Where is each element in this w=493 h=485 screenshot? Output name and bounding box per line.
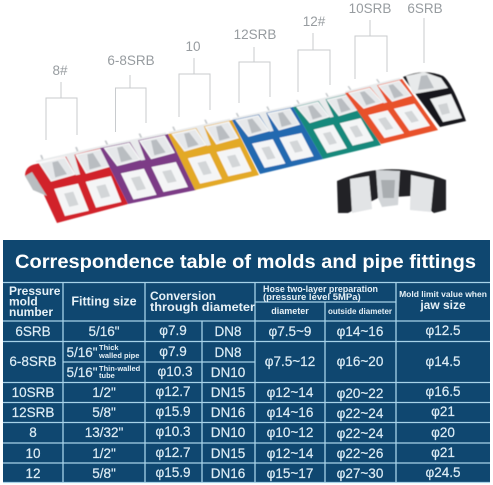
mold: black single mold detail: [337, 169, 446, 213]
row 6SRB: [15, 323, 461, 339]
header: hose: diameter: [271, 306, 309, 316]
label: 12#: 12#: [303, 14, 326, 29]
row 6-8SRB: φ7.5~12: [265, 354, 315, 369]
mold: orange 10SRB: [343, 74, 438, 144]
row 6-8SRB: 5/16": [66, 365, 98, 380]
header: hose: [263, 284, 392, 316]
row 10SRB: φ12~14: [267, 385, 314, 400]
table panel: [3, 240, 490, 483]
row 10SRB: 10SRB: [12, 385, 54, 400]
row 10: φ12~14: [267, 446, 314, 461]
row 12SRB: φ22~24: [337, 406, 384, 421]
header: mold number: Pressure: [9, 284, 61, 298]
row 8: 8: [29, 425, 37, 440]
row 8: φ10.3: [155, 424, 191, 439]
row 12SRB: 5/8": [92, 405, 116, 420]
row 8: φ20: [431, 425, 455, 440]
row 6SRB: DN8: [214, 324, 242, 339]
label: 10: [179, 39, 210, 117]
row 12: 5/8": [92, 466, 116, 481]
row 6SRB: φ7.5~9: [269, 324, 311, 339]
header: fitting size: Fitting size: [71, 294, 137, 308]
grid lines: [3, 282, 490, 482]
label: 6SRB: 6SRB: [407, 1, 443, 16]
row 12SRB: φ21: [431, 404, 455, 419]
mold strip illustration: [25, 72, 466, 223]
row 6-8SRB: Thin-walled: [99, 364, 141, 373]
mold: purple 6-8SRB: [99, 128, 196, 204]
row 12: φ15.9: [155, 465, 191, 480]
label: 10: 10: [185, 39, 201, 54]
row 10: φ12.7: [155, 445, 191, 460]
row 6SRB: φ12.5: [425, 323, 461, 338]
row 10: [25, 445, 455, 461]
row 10SRB: φ12.7: [155, 384, 191, 399]
row 12: φ15~17: [267, 466, 313, 481]
row 10: φ22~26: [337, 446, 383, 461]
row 6-8SRB: Thick: [99, 343, 119, 352]
row 12SRB: DN16: [211, 405, 245, 420]
row 12: DN16: [211, 466, 245, 481]
row 8: [29, 424, 455, 441]
row 10: 10: [25, 446, 41, 461]
row 6-8SRB: walled pipe: [98, 351, 139, 360]
header: jaw size: [399, 289, 487, 312]
row 10SRB: [12, 384, 461, 401]
row 10: 1/2": [92, 446, 116, 461]
label: 6-8SRB: 6-8SRB: [107, 53, 155, 68]
row 8: φ22~24: [337, 426, 384, 441]
row 6-8SRB: φ7.9: [159, 344, 187, 359]
mold: blue 12SRB: [230, 102, 323, 174]
header: conversion: through diameter: [150, 300, 255, 314]
header: conversion: [150, 289, 255, 314]
label: 10SRB: [349, 1, 391, 79]
row 12SRB: [12, 404, 455, 421]
label: 12SRB: 12SRB: [234, 27, 276, 42]
row 6-8SRB: φ10.3: [157, 364, 193, 379]
label: 6-8SRB: [107, 53, 155, 132]
row 10: DN15: [211, 446, 245, 461]
header: jaw size: jaw size: [419, 298, 466, 312]
row 12SRB: 12SRB: [12, 405, 54, 420]
row 6-8SRB: 5/16": [66, 345, 98, 360]
header: hose: Hose two-layer preparation: [263, 284, 378, 295]
header: mold number: mold: [9, 294, 38, 308]
header: hose: (pressure level 5MPa): [263, 292, 361, 303]
header: hose: outside diameter: [328, 307, 392, 316]
row 12: 12: [25, 466, 41, 481]
row 10: φ21: [431, 445, 455, 460]
mold: teal 12#: [291, 88, 381, 159]
row 6-8SRB: DN10: [211, 365, 245, 380]
row 12: φ24.5: [425, 465, 461, 480]
row 12: φ27~30: [337, 466, 383, 481]
row 6-8SRB: [9, 343, 461, 380]
row 6-8SRB: tube: [99, 371, 115, 380]
row 6-8SRB: 6-8SRB: [9, 354, 57, 369]
mold: red 8#: [25, 141, 128, 223]
row 12SRB: φ15.9: [155, 404, 191, 419]
row 6-8SRB: DN8: [214, 345, 242, 360]
row 10SRB: 1/2": [92, 385, 116, 400]
label: 8#: [46, 63, 77, 140]
header: jaw size: Mold limit value when: [399, 289, 487, 299]
label: 6SRB: [407, 1, 443, 63]
row 6SRB: φ7.9: [159, 323, 187, 338]
header: mold number: number: [9, 305, 53, 319]
row 10SRB: DN15: [211, 385, 245, 400]
mold: yellow 10: [167, 115, 259, 190]
header: mold number: [9, 284, 61, 319]
title: Correspondence table of molds and pipe fittings: [15, 251, 476, 273]
row 6-8SRB: φ16~20: [337, 354, 383, 369]
label: 10SRB: 10SRB: [349, 1, 391, 16]
row 6SRB: 6SRB: [15, 324, 51, 339]
row 6SRB: φ14~16: [337, 324, 383, 339]
row 12: [25, 465, 461, 481]
row 12SRB: φ14~16: [267, 405, 313, 420]
row 10SRB: φ20~22: [337, 386, 383, 401]
row 8: 13/32": [85, 425, 123, 440]
row 8: DN10: [211, 425, 245, 440]
row 10SRB: φ16.5: [425, 384, 461, 399]
header: conversion: Conversion: [150, 289, 216, 303]
row 6-8SRB: φ14.5: [425, 354, 461, 369]
row 6SRB: 5/16": [88, 324, 120, 339]
label: 8#: 8#: [52, 63, 68, 78]
label: 12SRB: [234, 27, 276, 103]
mold: black 6SRB: [403, 72, 466, 127]
label: 12#: [298, 14, 330, 92]
row 8: φ10~12: [267, 425, 313, 440]
